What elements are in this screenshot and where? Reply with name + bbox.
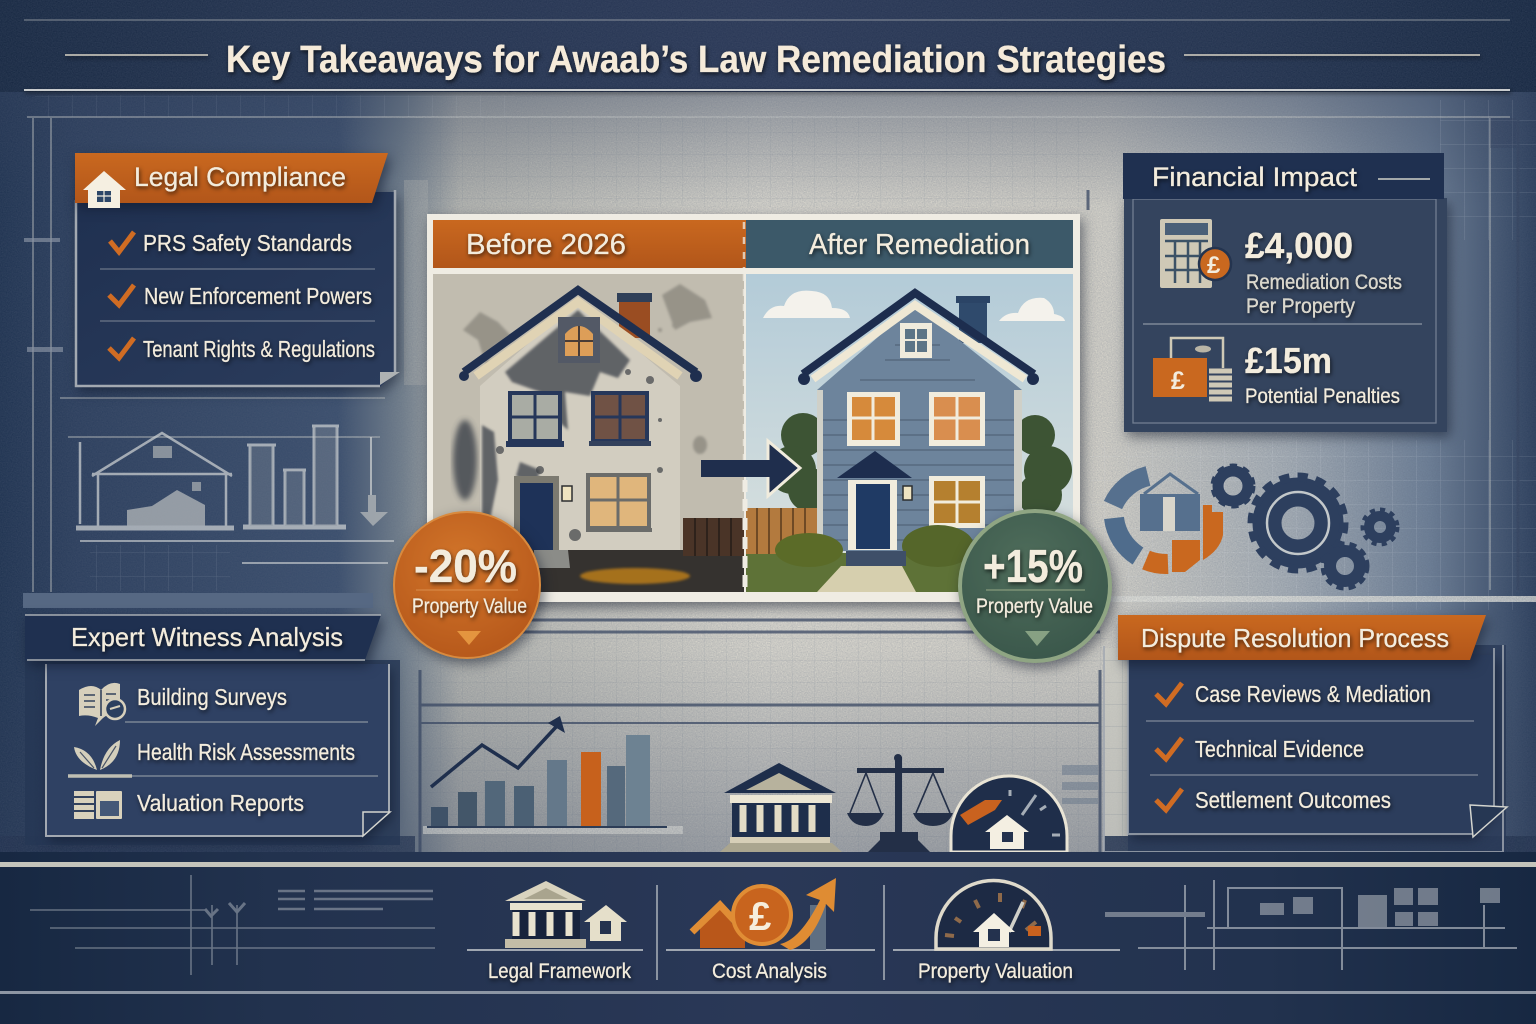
amount: 15m: Potential Penalties xyxy=(1245,385,1400,408)
footer item: cost analysis xyxy=(692,878,836,983)
before header: Before 2026 xyxy=(466,229,626,261)
legal compliance header: Legal Compliance xyxy=(134,162,346,192)
dispute checklist: Case Reviews & Mediation xyxy=(1195,681,1431,707)
icon: report xyxy=(74,791,122,819)
icon: pound coin with rising arrow xyxy=(692,878,836,950)
expert witness list: Valuation Reports xyxy=(137,790,304,816)
panel: legal compliance xyxy=(75,153,400,387)
compliance checklist: PRS Safety Standards xyxy=(143,230,352,256)
divider xyxy=(744,222,745,590)
icon: courthouse and house xyxy=(505,881,627,948)
compliance checklist xyxy=(100,230,375,362)
dispute header: Dispute Resolution Process xyxy=(1141,623,1449,653)
icon: open book xyxy=(79,683,125,726)
before house scene xyxy=(433,274,744,592)
panel: financial impact xyxy=(1123,153,1447,432)
icon: ring chart with house xyxy=(1113,474,1223,572)
expert witness header: Expert Witness Analysis xyxy=(71,622,343,652)
icon: courthouse xyxy=(720,763,842,852)
icon: calculator with pound coin: £ xyxy=(1207,252,1221,279)
after header: After Remediation xyxy=(809,229,1030,261)
footer item: legal framework xyxy=(488,881,631,983)
legal compliance header xyxy=(75,153,388,203)
icon: padlock with coins: £ xyxy=(1171,367,1185,395)
panel: expert witness analysis xyxy=(23,593,400,845)
icon: house xyxy=(83,171,126,208)
roof xyxy=(476,302,680,376)
footer sketch right xyxy=(1105,880,1517,970)
before header xyxy=(433,220,746,268)
icon: gauge with house xyxy=(936,880,1051,949)
amount: 4,000: £4,000 xyxy=(1245,225,1353,266)
trees xyxy=(768,413,1072,517)
expert witness header xyxy=(25,615,381,660)
after header xyxy=(746,220,1073,268)
comparison frame xyxy=(427,214,1080,602)
badge: plus 15 percent xyxy=(960,511,1110,661)
amount: 15m xyxy=(1245,340,1400,408)
dispute checklist: Settlement Outcomes xyxy=(1195,787,1391,813)
badge: minus 20 percent: -20% xyxy=(414,540,517,592)
icon: scales of justice xyxy=(847,754,953,852)
title: Key Takeaways for Awaab’s Law Remediation Strategies xyxy=(226,39,1166,81)
cost analysis label: Cost Analysis xyxy=(712,960,827,983)
badge: minus 20 percent: Property Value xyxy=(412,595,527,618)
financial header: Financial Impact xyxy=(1152,162,1358,192)
sketch: house and bars xyxy=(76,426,394,563)
icon: value gauge xyxy=(951,776,1067,852)
icon: pound coin with rising arrow: £ xyxy=(749,895,771,939)
arrow xyxy=(701,441,800,496)
financial body xyxy=(1124,198,1447,432)
expert witness list xyxy=(125,684,378,816)
amount: 4,000 xyxy=(1245,225,1402,318)
expert witness list: Building Surveys xyxy=(137,684,287,710)
panel: dispute resolution process xyxy=(1104,615,1507,852)
amount: 4,000: Remediation Costs xyxy=(1246,271,1402,294)
expert witness body xyxy=(46,664,389,836)
compliance checklist: New Enforcement Powers xyxy=(144,283,372,309)
amount: 15m: £15m xyxy=(1245,340,1332,381)
compliance checklist: Tenant Rights & Regulations xyxy=(143,336,375,362)
expert witness list: Health Risk Assessments xyxy=(137,739,355,765)
footer sketch left xyxy=(30,875,435,975)
legal compliance body xyxy=(75,192,396,387)
badge: minus 20 percent xyxy=(394,512,540,658)
icon: padlock with coins xyxy=(1153,338,1232,399)
footer band xyxy=(0,852,1536,1024)
amount: 4,000: Per Property xyxy=(1246,295,1355,318)
panel: before and after comparison xyxy=(394,214,1110,661)
icon: gears xyxy=(1213,466,1397,588)
clouds xyxy=(763,291,1065,321)
financial header xyxy=(1123,153,1444,199)
bar chart xyxy=(427,716,667,827)
icon: calculator with pound coin xyxy=(1160,219,1231,288)
legal framework label: Legal Framework xyxy=(488,960,631,983)
property valuation label: Property Valuation xyxy=(918,960,1073,983)
roof xyxy=(813,305,1025,379)
badge: plus 15 percent: Property Value xyxy=(976,595,1093,618)
dispute checklist: Technical Evidence xyxy=(1195,736,1364,762)
dispute body xyxy=(1128,655,1495,834)
footer item: property valuation xyxy=(918,880,1073,983)
badge: plus 15 percent: +15% xyxy=(983,540,1083,592)
dispute checklist xyxy=(1146,681,1478,813)
icon: leaves xyxy=(68,740,132,776)
dispute header xyxy=(1118,615,1486,660)
after house scene xyxy=(746,274,1073,592)
